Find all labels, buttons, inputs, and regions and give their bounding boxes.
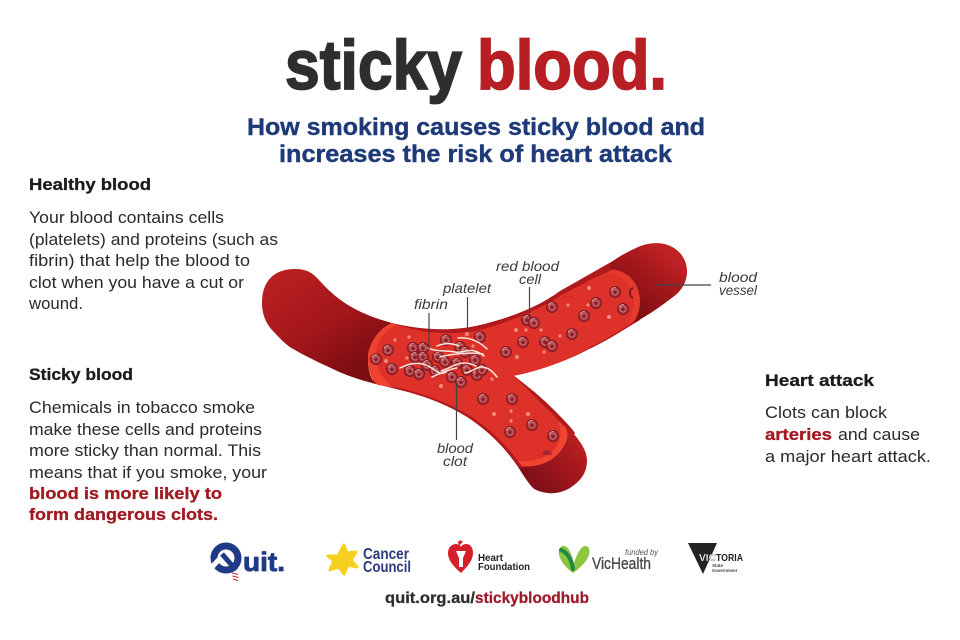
right vessel opening <box>610 243 687 323</box>
left vessel opening <box>262 269 392 384</box>
text block: heart attack: arteries <box>765 425 832 444</box>
label: red blood cell: red blood <box>496 258 560 274</box>
logo: Cancer Council: Cancer <box>363 546 409 563</box>
text block: sticky blood: form dangerous clots. <box>29 505 218 524</box>
text block: healthy blood: Your blood contains cells <box>29 209 224 227</box>
text block: sticky blood: more sticky than normal. This <box>29 442 261 460</box>
text block: sticky blood: make these cells and proteins <box>29 421 262 439</box>
text block: sticky blood: Sticky blood <box>29 365 133 384</box>
text block: sticky blood: Chemicals in tobacco smoke <box>29 399 255 417</box>
label: blood vessel <box>656 269 758 298</box>
text block: sticky blood <box>29 365 268 524</box>
title: sticky <box>285 26 462 104</box>
label: fibrin <box>414 296 448 349</box>
label: fibrin: fibrin <box>414 296 448 312</box>
logo: Victoria State Government: VIC <box>699 553 716 564</box>
label: platelet <box>442 280 492 331</box>
website url: quit.org.au/ <box>385 590 476 607</box>
label: blood clot: blood <box>437 440 474 456</box>
red blood cells <box>370 286 633 455</box>
label: platelet: platelet <box>442 280 492 296</box>
label: blood vessel: blood <box>719 269 758 285</box>
text block: healthy blood: clot when you have a cut or <box>29 274 245 292</box>
platelets <box>384 286 611 423</box>
text block: healthy blood <box>28 175 278 313</box>
text block: healthy blood: wound. <box>28 295 83 313</box>
logo: Cancer Council <box>328 545 411 576</box>
lower vessel opening <box>518 425 587 493</box>
text block: heart attack: Heart attack <box>765 371 875 390</box>
logo: Victoria State Government: State <box>712 563 724 568</box>
text block: healthy blood: (platelets) and proteins (such as <box>29 231 278 249</box>
logo: VicHealth <box>559 546 659 573</box>
logo: Victoria State Government: TORIA <box>716 553 743 564</box>
title: blood. <box>477 26 667 104</box>
text block: heart attack: a major heart attack. <box>765 448 931 466</box>
diagram: blood vessel <box>262 243 687 493</box>
website url: stickybloodhub <box>475 590 589 607</box>
logo: Heart Foundation: Foundation <box>478 562 530 573</box>
lumen rim <box>368 323 396 387</box>
logo: Cancer Council: Council <box>363 559 411 576</box>
logo: Quit: uit. <box>243 547 285 577</box>
cells clipped by the lumen edge <box>630 288 633 298</box>
text block: heart attack <box>765 371 931 466</box>
text block: heart attack: Clots can block <box>765 404 888 422</box>
text block: sticky blood: means that if you smoke, your <box>29 464 268 482</box>
label: blood clot: clot <box>443 453 468 469</box>
vessel inner lumen <box>368 270 640 466</box>
logo: Victoria State Government: Government <box>712 568 737 573</box>
subtitle <box>247 114 705 168</box>
text block: healthy blood: Healthy blood <box>29 175 151 194</box>
logo: Heart Foundation <box>448 541 530 573</box>
label: red blood cell <box>496 258 560 319</box>
vessel outer wall <box>372 251 640 470</box>
text block: sticky blood: blood is more likely to <box>29 484 222 503</box>
subtitle: increases the risk of heart attack <box>279 141 673 168</box>
text block: heart attack: and cause <box>838 426 920 444</box>
logo: Heart Foundation: Heart <box>478 553 504 564</box>
label: blood clot <box>437 382 474 469</box>
logo: VicHealth: funded by <box>625 547 659 557</box>
text block: healthy blood: fibrin) that help the blood to <box>29 252 250 270</box>
logo: VicHealth: VicHealth <box>592 554 651 573</box>
label: blood vessel: vessel <box>719 282 758 298</box>
fibrin strands <box>400 338 497 377</box>
label: red blood cell: cell <box>519 271 542 287</box>
logo: Quit <box>212 546 285 580</box>
title <box>285 26 667 104</box>
logo: Victoria State Government <box>688 543 743 574</box>
subtitle: How smoking causes sticky blood and <box>247 114 705 141</box>
website url <box>385 590 589 607</box>
